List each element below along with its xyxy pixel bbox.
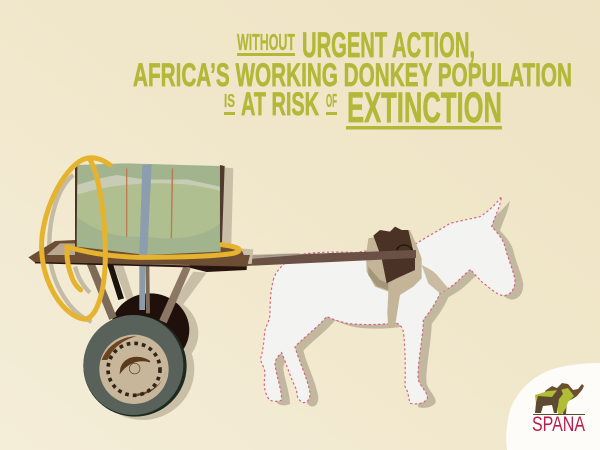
logo light donkey xyxy=(535,388,574,414)
title line 3: AT RISK xyxy=(241,86,319,122)
cart shadow xyxy=(91,167,253,420)
cart struts xyxy=(87,264,191,323)
logo xyxy=(506,363,600,450)
logo wordmark: SPANA xyxy=(532,413,585,436)
logo ground line xyxy=(533,414,585,415)
logo dark donkey xyxy=(535,389,563,413)
title line 1: URGENT ACTION, xyxy=(302,26,475,65)
saddle padding xyxy=(366,230,422,328)
saddle strap ring xyxy=(397,245,413,250)
rear wheel xyxy=(111,293,189,367)
donkey body xyxy=(261,197,515,404)
title xyxy=(133,26,572,132)
title line 1: WITHOUT xyxy=(237,29,295,55)
donkey shadow xyxy=(269,201,523,408)
cart platform xyxy=(28,240,250,272)
title line 3: EXTINCTION xyxy=(347,84,502,132)
title line 3: IS xyxy=(224,91,235,111)
front wheel xyxy=(83,315,187,417)
logo background xyxy=(506,363,600,450)
saddle padding shading xyxy=(368,267,388,290)
yellow hose xyxy=(42,158,239,319)
title line 3 xyxy=(224,84,502,132)
saddle pack xyxy=(373,227,415,283)
harness strap xyxy=(422,265,448,293)
donkey xyxy=(261,197,523,408)
title line 1 xyxy=(237,26,475,65)
title line 3: OF xyxy=(326,91,337,111)
shaft xyxy=(245,250,416,266)
hose shadow xyxy=(49,175,92,322)
logo camel xyxy=(545,383,584,414)
cart xyxy=(28,158,253,420)
water tank xyxy=(75,163,225,255)
